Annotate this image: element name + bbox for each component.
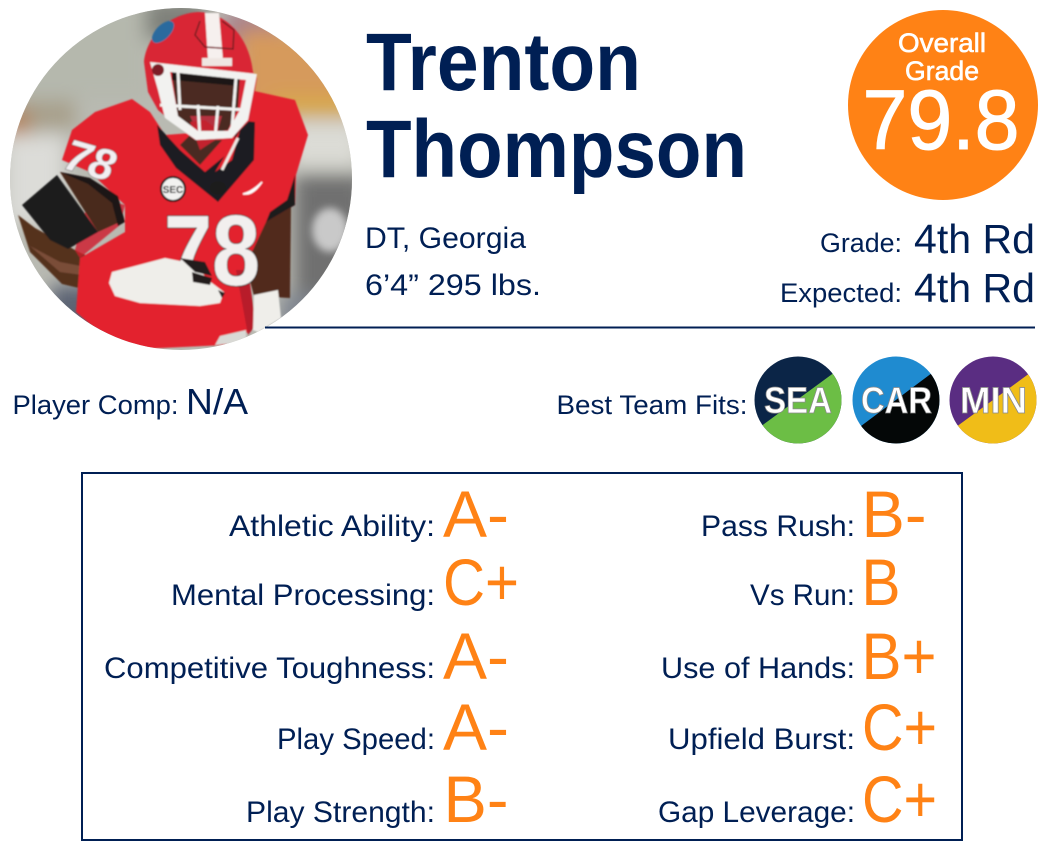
right column grades: Upfield Burst: (668, 723, 855, 756)
expected round: Expected: (780, 278, 902, 308)
jersey (62, 90, 308, 350)
player name: Thompson (366, 104, 747, 195)
draft grade: 4th Rd (914, 216, 1035, 262)
sleeve number: 78 (59, 131, 121, 192)
overall grade badge: 79.8 (862, 73, 1020, 167)
right arm (245, 205, 291, 298)
left column grades: Athletic Ability: (229, 510, 435, 543)
right column grades: C+ (862, 690, 937, 764)
team badge: SEA (754, 356, 842, 444)
player comp (12, 381, 248, 422)
upper arm (60, 172, 120, 232)
face (172, 78, 241, 132)
player photo: SEC (163, 185, 183, 196)
overall grade badge: Overall (898, 28, 986, 58)
height and weight: 6’4” 295 lbs. (365, 269, 541, 302)
left column grades (104, 477, 519, 836)
left column grades: A- (443, 477, 509, 551)
player comp: Player Comp: (12, 390, 178, 420)
best team fits label: Best Team Fits: (556, 390, 748, 420)
left forearm (17, 214, 86, 288)
left column grades: Competitive Toughness: (104, 652, 435, 685)
draft grade (820, 216, 1035, 262)
right column grades: B+ (862, 619, 936, 693)
right column grades: C+ (862, 762, 937, 836)
overall grade badge (848, 10, 1038, 200)
left column grades: A- (443, 619, 509, 693)
player name: Trenton (366, 17, 641, 108)
team badge: CAR: CAR (861, 380, 932, 421)
right column grades: Pass Rush: (701, 510, 855, 543)
expected round (780, 265, 1035, 311)
right column grades: Use of Hands: (661, 652, 855, 685)
sleeve trim (266, 175, 295, 222)
panel: trait grades (82, 473, 962, 840)
collar (157, 120, 255, 202)
team badge: CAR (852, 356, 940, 444)
player photo (0, 0, 365, 355)
left column grades: C+ (443, 545, 519, 619)
wrist wrap (253, 290, 281, 332)
draft grade: Grade: (820, 228, 902, 258)
facemask (150, 62, 257, 140)
left column grades: B- (444, 762, 508, 836)
chest number: 78 (164, 195, 260, 307)
team badge: SEA: SEA (764, 380, 832, 421)
expected round: 4th Rd (914, 265, 1035, 311)
right column grades (658, 477, 937, 836)
right column grades: Vs Run: (750, 579, 855, 612)
left column grades: Play Speed: (277, 723, 435, 756)
player name (366, 17, 747, 195)
left column grades: Play Strength: (246, 796, 435, 829)
right column grades: B (862, 545, 900, 619)
position and school: DT, Georgia (365, 222, 526, 255)
chest logos (161, 177, 185, 201)
left column grades: A- (443, 690, 509, 764)
team badge: MIN (950, 356, 1036, 444)
helmet (144, 12, 257, 140)
arm band (22, 175, 98, 249)
overall grade badge: Grade (905, 56, 979, 86)
player comp: N/A (186, 381, 248, 422)
right column grades: B- (862, 477, 926, 551)
right column grades: Gap Leverage: (658, 796, 855, 829)
team badge: MIN: MIN (960, 380, 1027, 421)
left column grades: Mental Processing: (171, 579, 435, 612)
wrapped hand (109, 258, 224, 306)
